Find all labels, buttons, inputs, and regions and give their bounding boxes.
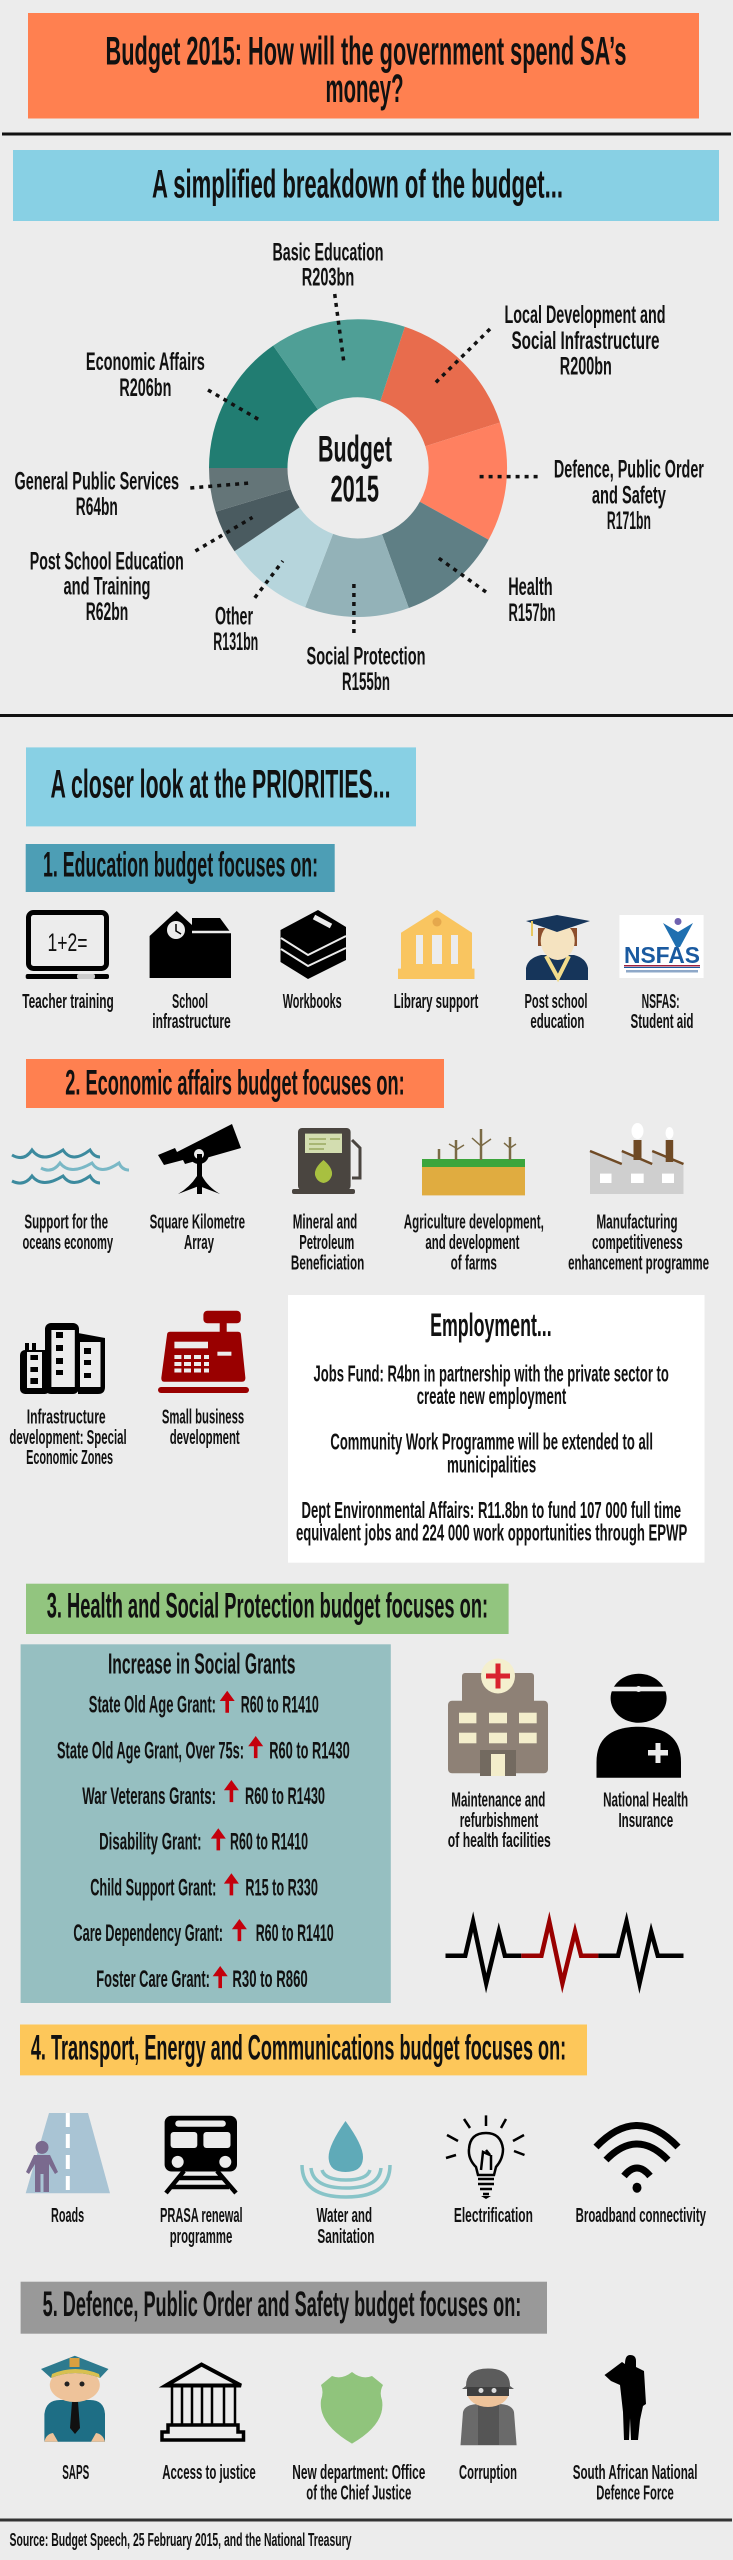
panel: increase in social grants: Foster Care Grant: bbox=[96, 1966, 210, 1993]
panel: employment bbox=[288, 1295, 704, 1563]
labels: health bbox=[448, 1789, 688, 1852]
labels: defence: of the Chief Justice bbox=[306, 2481, 411, 2504]
heading: simplified breakdown bbox=[13, 150, 719, 221]
icon: petrol pump bbox=[292, 1128, 360, 1194]
icon: library support bbox=[398, 910, 474, 979]
icon: agriculture bbox=[422, 1129, 525, 1195]
donut labels: Post School Education bbox=[30, 547, 184, 575]
labels: transport bbox=[51, 2204, 706, 2248]
labels: transport: Water and bbox=[316, 2204, 372, 2227]
labels: defence: Access to justice bbox=[162, 2461, 256, 2484]
panel: increase in social grants: Care Dependency Grant: bbox=[73, 1920, 223, 1947]
labels: health: Insurance bbox=[618, 1809, 673, 1832]
panel: increase in social grants: War Veterans Grants: bbox=[82, 1783, 216, 1810]
donut labels: R157bn bbox=[508, 599, 556, 627]
labels: defence: Corruption bbox=[459, 2461, 517, 2484]
donut labels: Health bbox=[508, 573, 553, 601]
panel: increase in social grants: R60 to R1410 bbox=[230, 1829, 308, 1856]
section 1 heading: education: 1. Education budget focuses on: bbox=[43, 846, 318, 884]
panel: increase in social grants: State Old Age Grant, Over 75s: bbox=[57, 1737, 244, 1764]
donut labels bbox=[14, 238, 704, 696]
icon: nurse bbox=[596, 1674, 681, 1778]
labels: economic affairs row 2: Economic Zones bbox=[26, 1446, 113, 1469]
labels: education: Teacher training bbox=[22, 990, 114, 1013]
donut labels: Other bbox=[215, 602, 253, 630]
labels: economic affairs row 2 bbox=[9, 1405, 244, 1469]
panel: increase in social grants: R60 to R1430 bbox=[245, 1783, 325, 1810]
labels: defence bbox=[62, 2461, 697, 2504]
icon: heartbeat line bbox=[446, 1922, 684, 1983]
dotted leader lines bbox=[190, 294, 538, 634]
chart centre label: Budget bbox=[318, 428, 392, 469]
increase arrows bbox=[211, 1691, 263, 1988]
panel: increase in social grants bbox=[21, 1644, 391, 2003]
section 4 heading: transport, energy and communications bbox=[20, 2024, 587, 2075]
labels: economic affairs row 1: Support for the bbox=[24, 1211, 108, 1234]
labels: defence: New department: Office bbox=[292, 2461, 425, 2484]
panel: increase in social grants: R60 to R1410 bbox=[241, 1691, 319, 1718]
panel: employment: municipalities bbox=[447, 1451, 536, 1477]
labels: education: education bbox=[530, 1010, 584, 1033]
chart centre label: 2015 bbox=[331, 468, 379, 509]
labels: economic affairs row 1: of farms bbox=[451, 1251, 497, 1274]
panel: increase in social grants: Disability Grant: bbox=[99, 1829, 202, 1856]
donut labels: and Training bbox=[64, 573, 150, 601]
donut labels: R131bn bbox=[213, 628, 258, 656]
heading: closer look at priorities: A closer look at the PRIORITIES... bbox=[50, 763, 390, 807]
labels: economic affairs row 2: Infrastructure bbox=[27, 1405, 106, 1428]
labels: economic affairs row 1: Array bbox=[184, 1231, 214, 1254]
labels: economic affairs row 1: Square Kilometre bbox=[150, 1211, 245, 1234]
icon: factory bbox=[590, 1123, 684, 1194]
icon: soldier bbox=[604, 2355, 646, 2440]
labels: education: infrastructure bbox=[152, 1010, 231, 1033]
icon: teacher training bbox=[26, 912, 109, 979]
panel: employment: create new employment bbox=[417, 1383, 566, 1409]
icon: telescope bbox=[158, 1124, 241, 1194]
icon: broadband bbox=[596, 2126, 678, 2193]
section 1 heading: education bbox=[26, 844, 335, 892]
icon: buildings bbox=[20, 1323, 105, 1394]
labels: economic affairs row 2: development: Special bbox=[9, 1426, 127, 1449]
section 3 heading: health and social protection bbox=[26, 1584, 509, 1634]
labels: economic affairs row 1: Agriculture development, bbox=[404, 1211, 544, 1234]
labels: transport: Electrification bbox=[454, 2204, 533, 2227]
donut labels: R64bn bbox=[76, 493, 118, 521]
panel: increase in social grants: R30 to R860 bbox=[232, 1966, 308, 1993]
icon: school infrastructure bbox=[150, 911, 231, 978]
icon: water and sanitation bbox=[302, 2121, 390, 2197]
labels: health: of health facilities bbox=[448, 1829, 551, 1852]
panel: increase in social grants: R15 to R330 bbox=[245, 1874, 318, 1901]
title: money? bbox=[326, 67, 404, 111]
icon: hospital bbox=[448, 1658, 548, 1776]
icon: cash register bbox=[158, 1311, 249, 1393]
icon: electrification bbox=[446, 2115, 524, 2199]
icon: access to justice bbox=[162, 2364, 244, 2440]
labels: transport: Roads bbox=[51, 2204, 84, 2227]
labels: transport: programme bbox=[170, 2225, 232, 2248]
icon: police officer bbox=[41, 2356, 108, 2442]
labels: economic affairs row 1: Mineral and bbox=[293, 1211, 357, 1234]
icon: corruption bbox=[460, 2368, 517, 2445]
donut labels: Economic Affairs bbox=[86, 348, 205, 376]
labels: education: NSFAS: bbox=[642, 990, 680, 1013]
icon: teacher training: 1+2= bbox=[48, 929, 88, 957]
icon: NSFAS logo bbox=[619, 915, 704, 978]
donut labels: R155bn bbox=[342, 668, 390, 696]
section 2 heading: economic affairs: 2. Economic affairs budget focuses on: bbox=[65, 1063, 405, 1102]
chart centre label bbox=[318, 428, 392, 509]
labels: economic affairs row 1 bbox=[22, 1211, 709, 1274]
labels: transport: PRASA renewal bbox=[160, 2204, 243, 2227]
labels: transport: Sanitation bbox=[317, 2225, 374, 2248]
icon: graduate bbox=[526, 915, 590, 980]
labels: education bbox=[22, 990, 693, 1033]
labels: economic affairs row 1: and development bbox=[425, 1231, 519, 1254]
donut labels: R62bn bbox=[86, 598, 128, 626]
panel: increase in social grants: Increase in Social Grants bbox=[108, 1649, 295, 1681]
labels: education: Post school bbox=[524, 990, 588, 1013]
panel: employment: Employment... bbox=[430, 1307, 552, 1343]
labels: economic affairs row 2: development bbox=[170, 1426, 240, 1449]
panel: increase in social grants: State Old Age Grant: bbox=[89, 1691, 216, 1718]
labels: health: Maintenance and bbox=[451, 1789, 545, 1812]
labels: defence: SAPS bbox=[62, 2461, 89, 2484]
panel: increase in social grants: R60 to R1430 bbox=[269, 1737, 350, 1764]
panel: increase in social grants: R60 to R1410 bbox=[256, 1920, 334, 1947]
icon: train bbox=[165, 2116, 237, 2193]
donut labels: General Public Services bbox=[14, 467, 179, 495]
labels: education: Library support bbox=[394, 990, 478, 1013]
icon: NSFAS logo: NSFAS bbox=[624, 942, 700, 968]
labels: economic affairs row 2: Small business bbox=[162, 1405, 244, 1428]
icon: ocean waves bbox=[12, 1150, 129, 1183]
donut labels: R203bn bbox=[302, 264, 354, 292]
donut labels: and Safety bbox=[592, 482, 666, 510]
panel: increase in social grants: Child Support Grant: bbox=[90, 1874, 216, 1901]
labels: education: Workbooks bbox=[283, 990, 342, 1013]
labels: health: refurbishment bbox=[460, 1809, 538, 1832]
section 5 heading: defence, public order and safety bbox=[21, 2282, 547, 2334]
labels: education: School bbox=[172, 990, 208, 1013]
icon: shield bbox=[321, 2372, 383, 2444]
icon: workbooks bbox=[280, 910, 346, 979]
labels: economic affairs row 1: Petroleum bbox=[299, 1231, 354, 1254]
section 2 heading: economic affairs bbox=[26, 1059, 444, 1108]
donut labels: Social Protection bbox=[306, 642, 426, 670]
icon: roads bbox=[26, 2113, 110, 2193]
title bbox=[28, 13, 699, 118]
donut labels: R200bn bbox=[560, 353, 612, 381]
donut labels: Basic Education bbox=[272, 238, 384, 266]
labels: economic affairs row 1: oceans economy bbox=[22, 1231, 113, 1254]
donut chart bbox=[209, 319, 507, 617]
labels: economic affairs row 1: Beneficiation bbox=[291, 1251, 364, 1274]
donut labels: R171bn bbox=[607, 507, 651, 535]
donut labels: R206bn bbox=[119, 374, 171, 402]
heading: closer look at priorities bbox=[26, 747, 416, 826]
source note: Source: Budget Speech, 25 February 2015, and the National Treasury bbox=[10, 2529, 352, 2550]
